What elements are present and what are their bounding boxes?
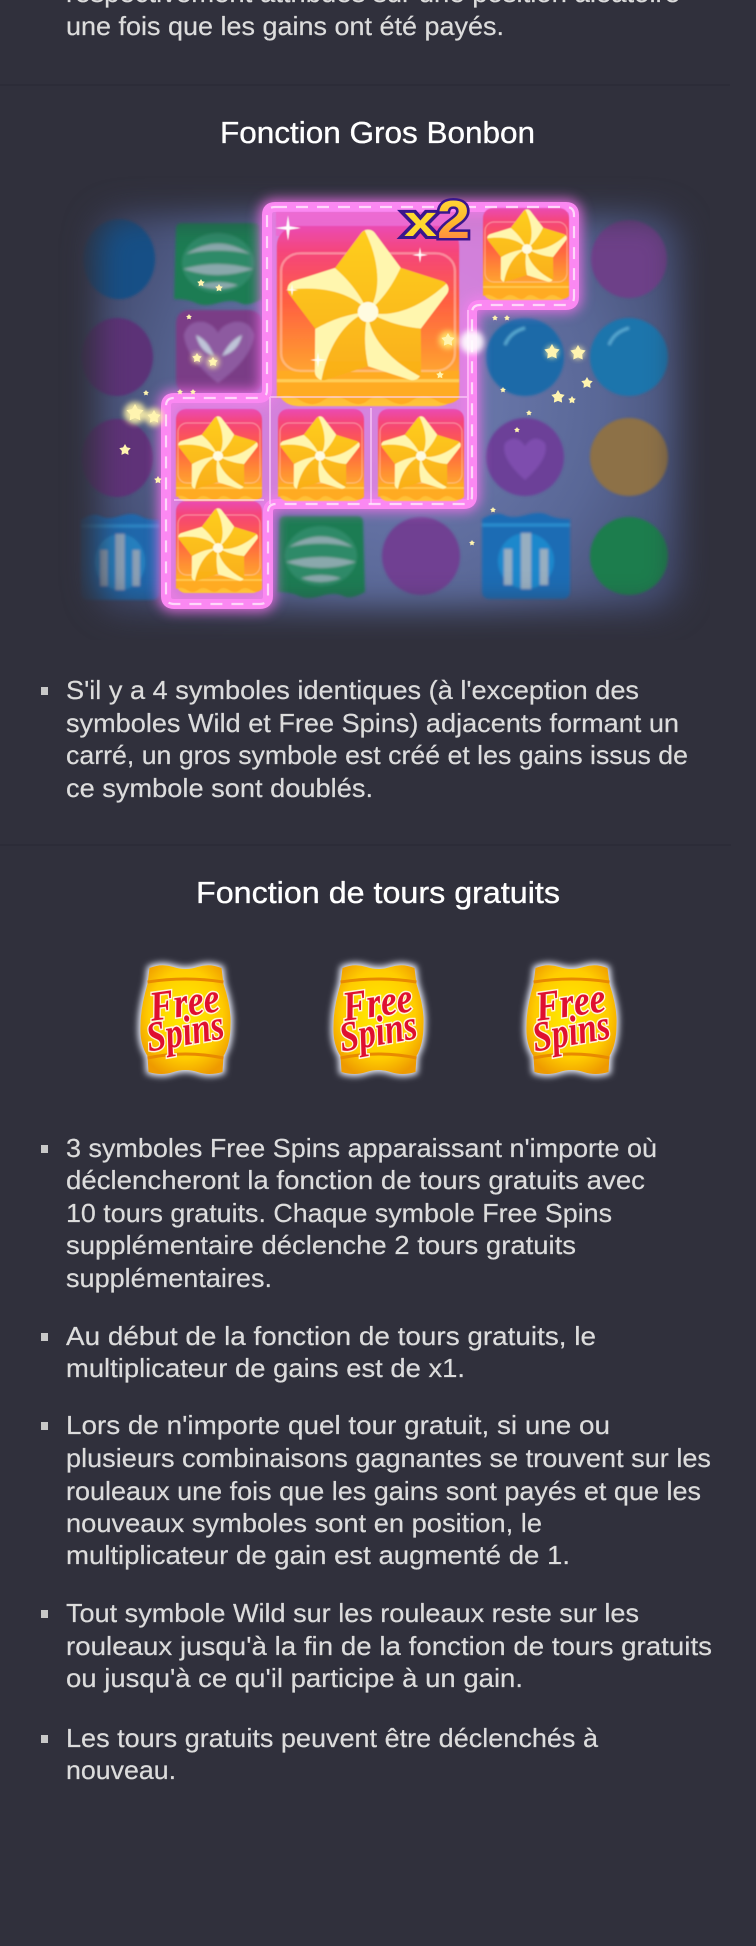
bullet: big candy explanation: symboles Wild et Free Spins) adjacents formant un <box>66 708 679 738</box>
bullet: trigger rule <box>41 1133 657 1293</box>
bullet: multiplier increase: multiplicateur de gain est augmenté de 1. <box>66 1540 570 1570</box>
heading: Fonction de tours gratuits: Fonction de tours gratuits <box>196 875 560 910</box>
icon: free spins bag 3: Free <box>532 975 608 1031</box>
bullet: multiplier increase: Lors de n'importe quel tour gratuit, si une ou <box>66 1410 610 1440</box>
icon: free spins bag 2: Free <box>339 975 415 1031</box>
bullet: multiplier increase: nouveaux symboles sont en position, le <box>66 1508 542 1538</box>
icon: free spins bag 3: Spins <box>529 1003 613 1061</box>
bullet: big candy explanation: carré, un gros symbole est créé et les gains issus de <box>66 740 688 770</box>
bullet: big candy explanation <box>41 675 688 803</box>
bullet: big candy explanation: ce symbole sont doublés. <box>66 773 373 803</box>
icon: free spins bag 2 <box>333 965 424 1074</box>
bullet: retrigger: Les tours gratuits peuvent être déclenchés à <box>66 1723 599 1753</box>
bullet: wild behaviour: ou jusqu'à ce qu'il participe à un gain. <box>66 1663 523 1693</box>
badge: x2 multiplier <box>404 190 470 250</box>
bullet: wild behaviour: rouleaux jusqu'à la fin de la fonction de tours gratuits <box>66 1631 712 1661</box>
icon: free spins bag 2: Spins <box>336 1003 420 1061</box>
panel: white dashed stitching <box>166 207 574 604</box>
bullet: wild behaviour <box>41 1598 712 1693</box>
icon: big star tile <box>261 208 483 422</box>
icon: free spins bag 1: Spins <box>143 1003 227 1061</box>
badge: x2 multiplier: x <box>404 197 438 246</box>
panel: blurred game board <box>80 196 696 629</box>
bullet: wild behaviour: Tout symbole Wild sur les rouleaux reste sur les <box>66 1598 639 1628</box>
bullet: starting multiplier: Au début de la fonction de tours gratuits, le <box>66 1321 596 1351</box>
badge: x2 multiplier: 2 <box>437 190 470 250</box>
icon: free spins bag 1 <box>140 965 231 1074</box>
bullet: trigger rule: supplémentaires. <box>66 1263 272 1293</box>
panel: inner cell lines <box>174 310 468 504</box>
icon: sparkles <box>119 279 593 545</box>
bullet: starting multiplier: multiplicateur de gains est de x1. <box>66 1353 465 1383</box>
bullet: starting multiplier <box>41 1321 596 1383</box>
icon: free spins bag 1: Free <box>146 975 222 1031</box>
bullet: multiplier increase <box>41 1410 711 1570</box>
bullet: trigger rule: 3 symboles Free Spins apparaissant n'importe où <box>66 1133 657 1163</box>
icon: dim candies on the board <box>80 219 668 600</box>
panel: glowing pink outline <box>166 207 574 604</box>
bullet: multiplier increase: plusieurs combinaisons gagnantes se trouvent sur les <box>66 1443 711 1473</box>
bullet: retrigger: nouveau. <box>66 1755 176 1785</box>
bullet: trigger rule: 10 tours gratuits. Chaque symbole Free Spins <box>66 1198 612 1228</box>
icon: small star tiles <box>165 199 584 601</box>
bullet: trigger rule: supplémentaire déclenche 2 tours gratuits <box>66 1230 576 1260</box>
bullet: trigger rule: déclencheront la fonction de tours gratuits avec <box>66 1165 645 1195</box>
illustration: big candy feature <box>80 188 696 629</box>
bullet: big candy explanation: S'il y a 4 symboles identiques (à l'exception des <box>66 675 639 705</box>
heading: Fonction Gros Bonbon: Fonction Gros Bonbon <box>220 115 535 150</box>
bullet: multiplier increase: rouleaux une fois que les gains sont payés et que les <box>66 1476 701 1506</box>
bullet: retrigger <box>41 1723 599 1785</box>
group: candy tiles softened <box>165 199 584 601</box>
icon: free spins bag 3 <box>526 965 617 1074</box>
text block: end of previous section: une fois que les gains ont été payés. <box>66 11 504 41</box>
text block: end of previous section <box>66 0 680 41</box>
